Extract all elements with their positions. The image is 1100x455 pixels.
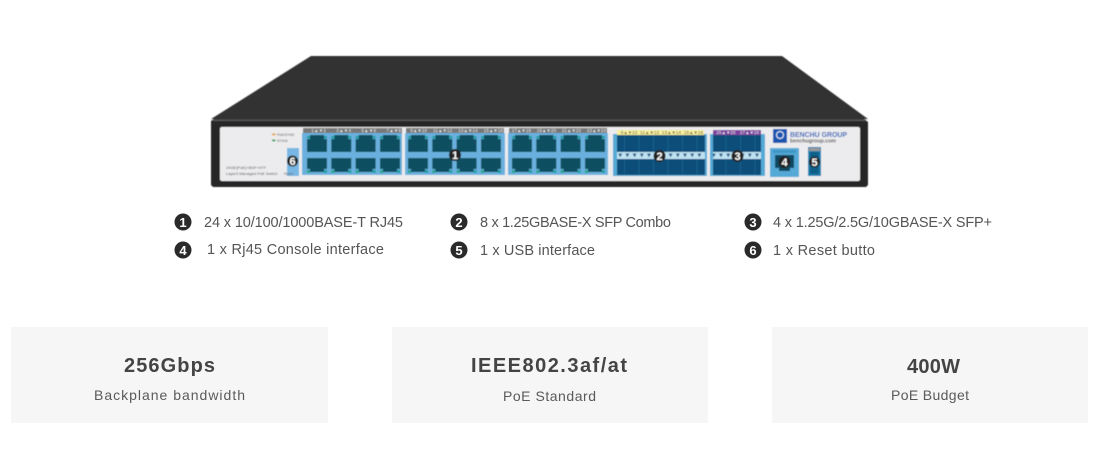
legend item 4: 1 x Rj45 Console interface <box>207 242 384 258</box>
USB port <box>808 147 821 176</box>
value: 256Gbps: 256Gbps <box>124 355 215 377</box>
SFP+ group: 25▲▼26 27▲▼28 <box>715 130 760 135</box>
brand logo: BENCHU GROUP <box>790 130 847 139</box>
reset button area <box>284 148 299 176</box>
switch device <box>211 56 868 187</box>
SFP combo group: 9▲▼10 11▲▼12 13▲▼14 15▲▼16 <box>618 130 704 135</box>
front panel <box>220 127 860 181</box>
legend <box>174 214 992 259</box>
RJ45 port group 17-24: 17▲▼18 19▲▼20 21▲▼22 23▲▼24 <box>509 128 607 133</box>
status LEDs: PoE/SYNC <box>277 133 295 137</box>
legend item 4: 4 <box>179 243 187 258</box>
panel: backplane bandwidth <box>11 327 328 423</box>
legend item 2: 8 x 1.25GBASE-X SFP Combo <box>480 215 671 231</box>
badges on device: 3 <box>734 151 741 163</box>
RJ45 port group 9-16: 9▲▼10 11▲▼12 13▲▼14 15▲▼16 <box>406 128 504 133</box>
legend item 2: 2 <box>455 215 463 230</box>
console port <box>770 148 799 177</box>
badges on device: 5 <box>811 157 818 169</box>
badges on device <box>287 149 820 169</box>
panel: PoE standard <box>392 327 708 423</box>
legend item 5: 1 x USB interface <box>480 243 595 259</box>
legend item 3: 3 <box>749 215 757 230</box>
status LEDs: SYS/A <box>277 139 288 143</box>
badges on device: 2 <box>656 151 663 163</box>
reset button area: Reset <box>284 172 293 176</box>
brand logo: benchugroup.com <box>790 138 837 144</box>
brand logo <box>773 129 847 144</box>
model label <box>226 165 278 176</box>
label: backplane bandwidth: Backplane bandwidth <box>94 387 245 403</box>
chassis front <box>211 119 868 187</box>
legend item 6: 1 x Reset butto <box>773 243 875 259</box>
panel: PoE budget <box>772 327 1088 423</box>
value: IEEE802.3af/at: IEEE802.3af/at <box>471 355 627 377</box>
RJ45 port group 1-8 <box>302 128 402 175</box>
SFP combo group <box>613 130 707 176</box>
badges on device: 1 <box>452 150 458 162</box>
model label: Layer3 Managed PoE Switch <box>226 171 278 176</box>
label: PoE budget: PoE Budget <box>891 387 969 403</box>
badges on device: 4 <box>781 157 788 169</box>
legend item 1: 1 <box>179 215 187 230</box>
legend item 1: 24 x 10/100/1000BASE-T RJ45 <box>204 215 403 231</box>
label: PoE standard: PoE Standard <box>503 388 596 404</box>
value: 400W: 400W <box>907 356 960 378</box>
chassis top surface <box>211 56 868 119</box>
RJ45 port group 9-16 <box>405 128 505 175</box>
badges on device: 6 <box>289 156 296 168</box>
status LEDs <box>272 133 295 143</box>
SFP+ group <box>710 130 765 176</box>
model label: 24GE(PoE)+8GF+4TF <box>226 165 267 170</box>
legend item 5: 5 <box>455 243 463 258</box>
legend item 3: 4 x 1.25G/2.5G/10GBASE-X SFP+ <box>773 215 992 231</box>
RJ45 port group 17-24 <box>508 128 608 175</box>
RJ45 port group 1-8: 1▲▼2 3▲▼4 5▲▼6 7▲▼8 <box>303 128 402 133</box>
legend item 6: 6 <box>749 243 757 258</box>
